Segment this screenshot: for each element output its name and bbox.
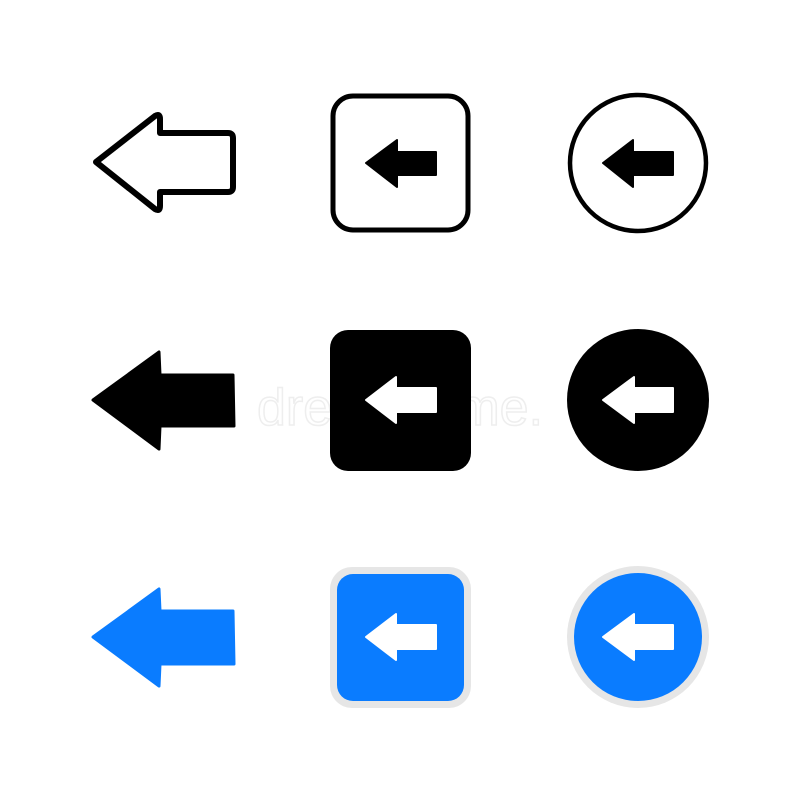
icon: blue arrow [93, 589, 234, 686]
icon: outline square with arrow [333, 96, 468, 230]
icon: black square with white arrow [330, 330, 471, 471]
icon: black circle with white arrow [567, 329, 709, 471]
icon: blue circle with white arrow [567, 566, 709, 708]
icon: filled black arrow [93, 352, 234, 449]
icon: blue square with white arrow [330, 567, 471, 708]
watermark: dreamstime. [257, 379, 543, 437]
icon: outline arrow [96, 115, 233, 210]
icon: outline circle with arrow [570, 95, 706, 231]
